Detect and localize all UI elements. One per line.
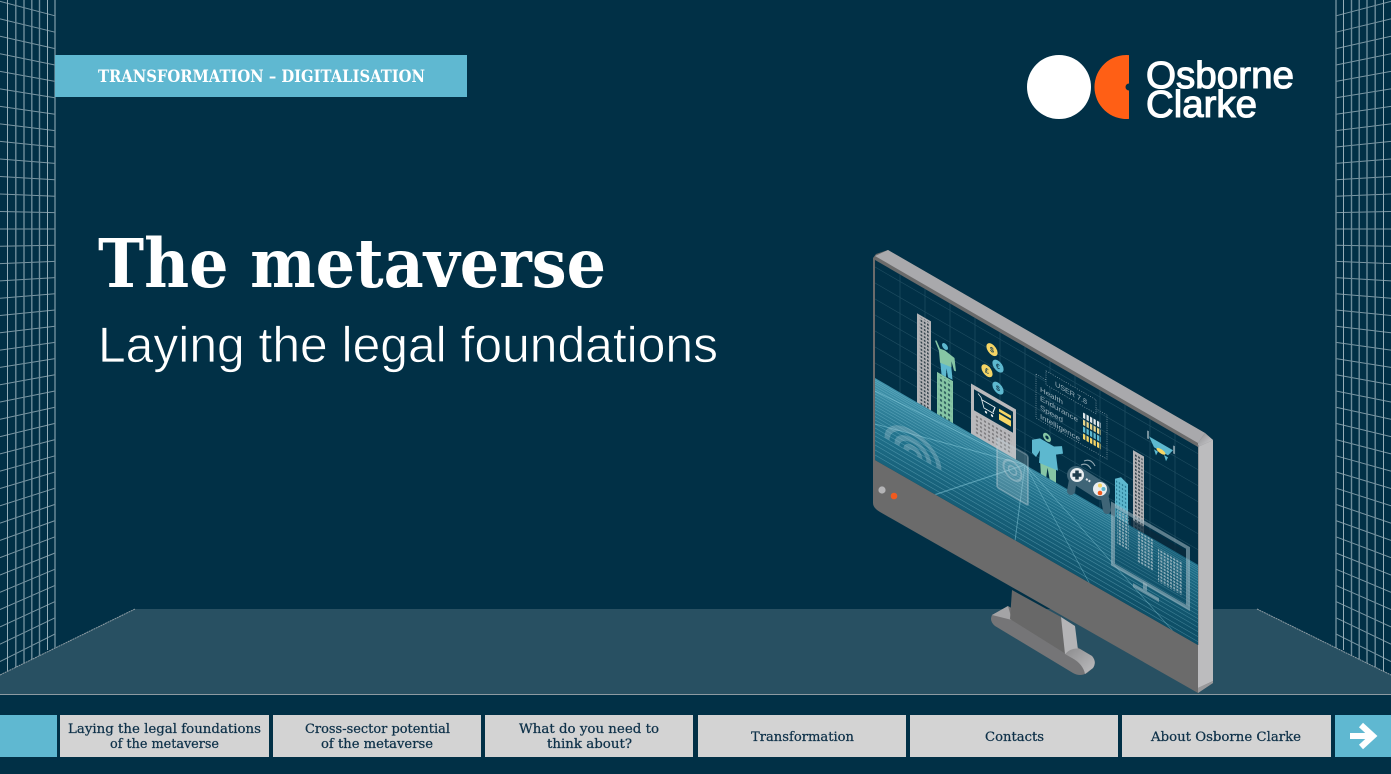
monitor illustration — [873, 250, 1213, 693]
nav: What do you need to think about — [485, 715, 693, 757]
person on building — [935, 340, 956, 380]
logo: Osborne Clarke: Osborne — [1146, 55, 1294, 97]
nav: left cyan tab — [0, 715, 57, 757]
monitor body — [873, 250, 1213, 693]
shopping kiosk — [971, 383, 1016, 461]
nav: Cross-sector potential — [273, 715, 481, 757]
game controller — [1070, 460, 1107, 510]
tall grey tower — [917, 313, 931, 411]
second grey tower — [1133, 450, 1144, 534]
nav: Contacts — [910, 715, 1118, 757]
title: The metaverse — [98, 224, 606, 303]
coins: £ — [985, 366, 990, 377]
nav: What do you need to think about: think about? — [547, 737, 632, 752]
player stats panel: Health — [1040, 385, 1063, 407]
subtitle: Laying the legal foundations — [98, 317, 718, 373]
floating tablet — [997, 438, 1028, 505]
nav: Laying the legal foundations — [60, 715, 269, 757]
power lights — [878, 486, 897, 499]
nav: Transformation: Transformation — [751, 730, 855, 745]
green building — [937, 372, 953, 425]
screen grid — [875, 260, 1198, 567]
player stats panel — [1036, 365, 1107, 459]
nav: Transformation — [698, 715, 906, 757]
nav: Laying the legal foundations: Laying the legal foundations — [68, 722, 261, 737]
category tag — [55, 55, 467, 97]
category tag: TRANSFORMATION – DIGITALISATION — [98, 67, 425, 86]
floating wifi icon — [887, 418, 939, 469]
navigation bar — [0, 715, 1391, 757]
player stats panel: Speed — [1040, 403, 1063, 425]
player stats panel: Endurance — [1040, 394, 1078, 424]
drone — [1148, 431, 1174, 466]
floating monitor — [1113, 505, 1188, 617]
monitor screen — [875, 260, 1198, 655]
coins: $ — [990, 345, 995, 356]
nav: next arrow — [1335, 715, 1391, 757]
logo: Osborne Clarke — [1027, 55, 1294, 126]
player stats panel: Intelligence — [1040, 412, 1080, 443]
nav: About Osborne Clarke — [1122, 715, 1331, 757]
coins: $ — [996, 383, 1001, 394]
nav: About Osborne Clarke: About Osborne Clarke — [1150, 730, 1301, 745]
nav: What do you need to think about: What do you need to — [519, 722, 659, 737]
coins — [981, 338, 1004, 397]
coins: € — [996, 361, 1001, 372]
right wall grid — [1336, 0, 1391, 680]
nav: Cross-sector potential: of the metaverse — [321, 737, 433, 752]
monitor stand — [991, 590, 1095, 675]
logo: Osborne Clarke: Clarke — [1146, 84, 1257, 126]
nav: Cross-sector potential: Cross-sector potential — [305, 722, 450, 737]
left wall grid — [0, 0, 55, 680]
nav: Contacts: Contacts — [985, 730, 1044, 745]
avatar figure — [1032, 432, 1063, 482]
floor platform — [0, 609, 1391, 695]
virtual floor — [875, 378, 1198, 655]
nav: Laying the legal foundations: of the metaverse — [110, 737, 219, 752]
cyan building — [1115, 474, 1128, 526]
player stats panel: USER 7.8 — [1055, 380, 1087, 406]
